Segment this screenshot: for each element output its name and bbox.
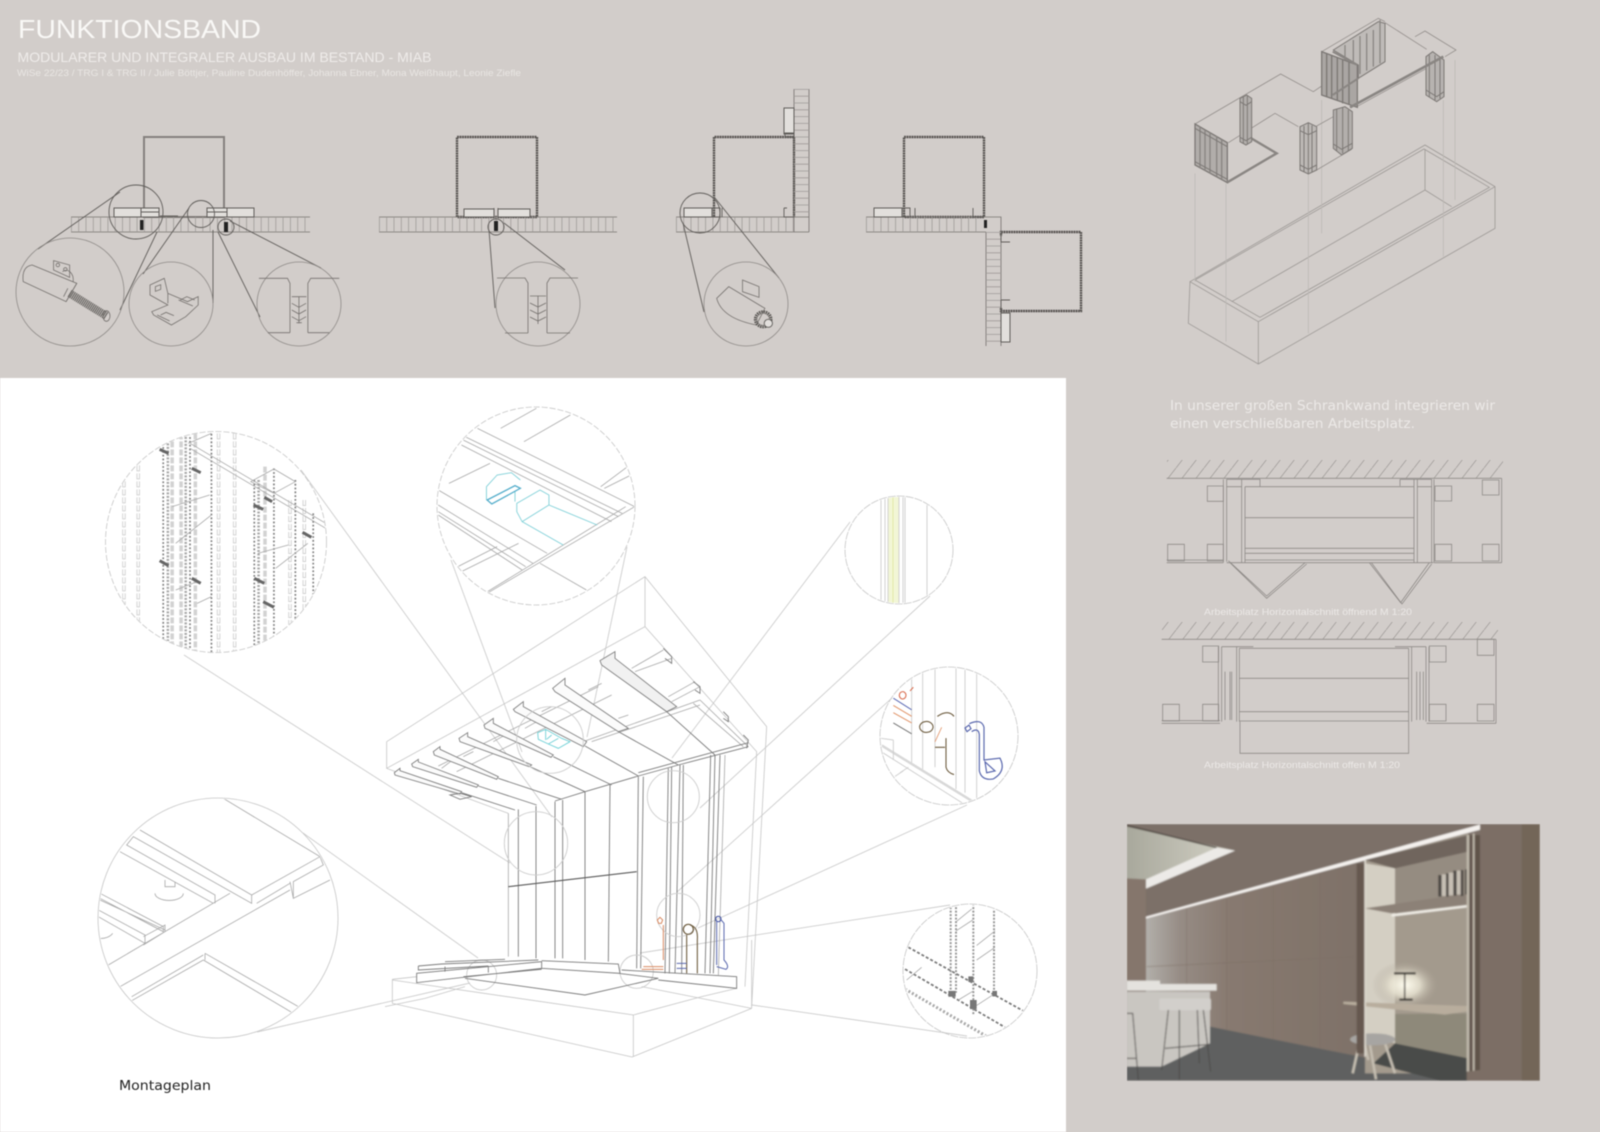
left wardrobe panel	[1195, 124, 1277, 183]
left wall	[1127, 878, 1146, 987]
upper carcass thin outline	[1195, 18, 1456, 170]
bar stool	[1127, 998, 1211, 1080]
floor	[1127, 1027, 1470, 1081]
detail circle: connector	[496, 262, 580, 346]
detail circle: hinge bracket	[129, 262, 213, 346]
upper shelf	[1365, 893, 1467, 913]
cabinet wall	[1145, 888, 1270, 1038]
detail circle: stud with yellow insulation band	[845, 490, 953, 610]
intro text: einen verschließbaren Arbeitsplatz.	[1170, 417, 1415, 432]
light strip	[1146, 824, 1502, 919]
detail circle: perforated rails at floor	[903, 904, 1037, 1038]
label: Montageplan: Montageplan	[119, 1078, 211, 1094]
detail marker circles	[467, 707, 700, 990]
detail circle: door damper	[16, 238, 124, 346]
wall studs and pipes	[467, 707, 728, 990]
section drawing 2: cabinet on floor	[379, 137, 617, 346]
room shell outline	[387, 577, 767, 1007]
horizontal section: workplace open	[1162, 622, 1498, 753]
detail circle: floor panels	[98, 798, 338, 1038]
interior rendering: cabinet wall with workplace	[1127, 824, 1540, 1081]
section drawing 4: cabinets on both wall sides	[866, 137, 1081, 346]
ceiling	[1126, 824, 1481, 1058]
cyan duct	[538, 729, 570, 748]
skylight	[1126, 826, 1232, 880]
column 1	[1240, 95, 1252, 145]
niche floor	[1373, 1043, 1468, 1081]
subtitle: MODULARER UND INTEGRALER AUSBAU IM BESTAND - MIAB	[18, 49, 432, 65]
left door stack	[1357, 863, 1364, 1053]
horizontal wall joint	[508, 872, 637, 887]
detail circle: ceiling duct in cyan	[437, 407, 635, 605]
isometric exploded cabinet and wall recess	[1188, 18, 1495, 364]
counter top	[1127, 981, 1217, 991]
beam end stubs	[663, 648, 748, 748]
right door stack	[1468, 835, 1480, 1072]
section drawing 3: cabinet in corner	[676, 89, 809, 346]
detail circle: connector	[257, 262, 341, 346]
section drawing 1: cabinet on floor with detail circles	[16, 137, 341, 346]
beams	[394, 652, 677, 794]
slats	[438, 650, 748, 772]
pipes	[642, 916, 728, 973]
desk lamp	[1394, 972, 1416, 1001]
panel: white assembly plan	[0, 378, 1066, 1132]
caption: open: Arbeitsplatz Horizontalschnitt offen M 1:20	[1204, 760, 1400, 770]
right wardrobe panels	[1322, 20, 1443, 107]
ceiling steel beams and slats	[394, 648, 748, 810]
kitchen counter	[1127, 992, 1210, 1067]
books	[1438, 869, 1467, 897]
horizontal section: workplace opening	[1167, 460, 1503, 604]
assembly drawing callout lines	[184, 470, 967, 1036]
skylight edge	[1146, 848, 1235, 889]
thin runs to wall	[450, 712, 715, 810]
studs	[518, 755, 720, 973]
skylight dark edge	[1127, 825, 1217, 848]
lamp glow	[1378, 966, 1432, 1004]
title: FUNKTIONSBAND	[18, 14, 261, 44]
detail circle: door damper	[704, 262, 788, 346]
stool	[1350, 1033, 1395, 1079]
right wall panel	[1466, 824, 1502, 1081]
base trough	[1188, 60, 1495, 364]
shelf light	[1392, 905, 1467, 917]
column 2	[1300, 123, 1317, 174]
floor plates and base block	[385, 940, 752, 1057]
desk top	[1343, 1002, 1467, 1015]
niche back wall	[1365, 833, 1468, 1073]
column 4	[1426, 52, 1444, 102]
column 3	[1333, 107, 1352, 155]
faint panel joints	[1147, 964, 1188, 968]
detail circle: coloured pipes	[880, 662, 1018, 805]
caption: opening: Arbeitsplatz Horizontalschnitt öffnend M 1:20	[1204, 607, 1412, 617]
intro text: In unserer großen Schrankwand integrieren wir	[1170, 399, 1496, 414]
credits: WiSe 22/23 / TRG I & TRG II / Julie Böttjer, Pauline Dudenhöffer, Johanna Ebner, Mona Weißhaupt, Leonie Ziefle	[17, 68, 521, 79]
intro text	[1170, 399, 1496, 432]
detail circle: perforated stud rails	[106, 430, 326, 653]
